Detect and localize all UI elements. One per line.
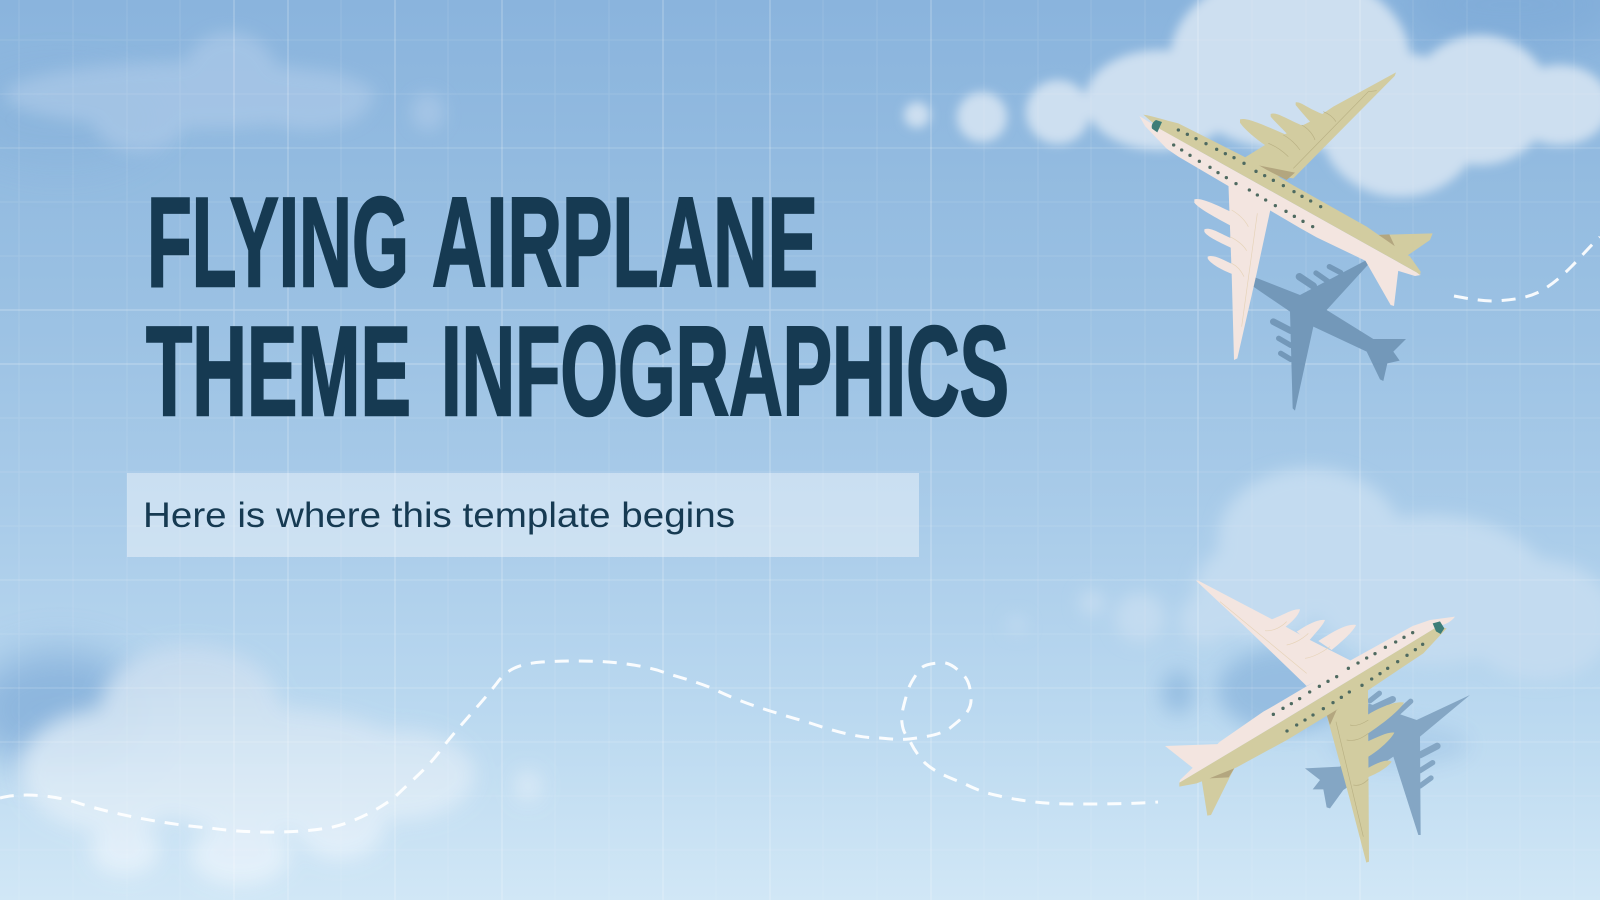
horizontal tail pink	[1165, 744, 1221, 768]
fuselage olive top	[1143, 115, 1421, 275]
fuselage olive underside	[1179, 626, 1447, 787]
near wing	[1327, 688, 1404, 863]
airplane 2	[1165, 581, 1470, 863]
near wing lines	[1336, 720, 1368, 837]
windows	[1174, 130, 1321, 227]
tail root shading	[1377, 234, 1395, 247]
cloud: middle right	[1009, 468, 1600, 680]
windows	[1273, 633, 1423, 731]
cloud: middle right shadow blobs	[1162, 648, 1470, 767]
near wing shading	[1327, 697, 1353, 725]
far wing panel lines	[1268, 91, 1377, 168]
lower tail	[1365, 260, 1398, 306]
near wing panel lines	[1230, 210, 1257, 327]
airplane 2 shadow	[1305, 693, 1470, 835]
title	[146, 171, 1009, 442]
airplane 1 shadow	[1253, 260, 1406, 411]
dashed flight path: main	[0, 661, 1158, 832]
far wing panel lines	[1220, 602, 1330, 673]
cockpit window	[1152, 120, 1162, 132]
far wing	[1240, 72, 1396, 178]
title: INFOGRAPHICS	[441, 300, 1009, 442]
dashed flight path: upper right	[1454, 237, 1600, 301]
fuselage pink underside	[1139, 116, 1421, 276]
lower tail olive	[1202, 767, 1235, 816]
fuselage pink top	[1179, 617, 1455, 783]
subtitle band	[127, 473, 919, 557]
airplane 1	[1139, 72, 1433, 411]
cloud: bottom left	[20, 645, 541, 885]
far wing	[1196, 581, 1356, 686]
cockpit window	[1433, 621, 1444, 634]
cloud: top right	[904, 0, 1600, 197]
near wing	[1194, 182, 1271, 360]
subtitle text: Here is where this template begins	[143, 496, 735, 535]
title: AIRPLANE	[432, 171, 818, 313]
title: THEME	[146, 300, 411, 442]
far wing root shading	[1257, 165, 1295, 180]
title: FLYING	[147, 171, 409, 313]
upper tail	[1377, 233, 1433, 258]
cloud: top left	[5, 32, 445, 152]
tail root shading	[1209, 767, 1235, 778]
